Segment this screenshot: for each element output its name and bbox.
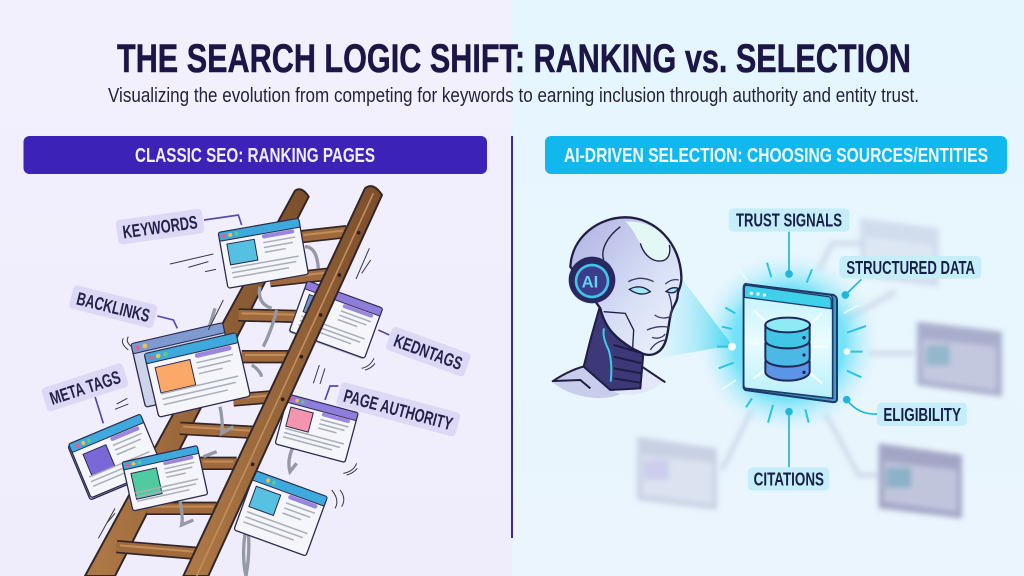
label: citations: CITATIONS (754, 469, 824, 490)
headphone: AI (582, 273, 598, 292)
label: trust signals: TRUST SIGNALS (736, 210, 842, 231)
white rays (721, 268, 859, 390)
label: structured data: STRUCTURED DATA (846, 257, 975, 278)
headphone (569, 257, 615, 303)
label: kedntags (385, 326, 472, 378)
scan beam (659, 277, 732, 358)
left heading bar (24, 136, 487, 174)
panel: classic SEO background (0, 0, 512, 576)
page card stack: backlinks (131, 323, 250, 417)
label: trust signals (729, 208, 849, 232)
ladder front rail (183, 186, 382, 576)
torn ropes (180, 247, 318, 576)
page card: keywords (218, 218, 308, 288)
label: page authority (336, 381, 461, 437)
page card: meta tags (67, 414, 163, 500)
blurred unselected sources (637, 218, 1002, 518)
ladder back rail and rungs (85, 189, 347, 576)
label: page authority: PAGE AUTHORITY (341, 385, 455, 434)
robot head (552, 217, 681, 398)
left heading bar: CLASSIC SEO: RANKING PAGES (135, 145, 375, 167)
label: meta tags: META TAGS (47, 366, 123, 409)
page card: kedntags (288, 281, 383, 360)
label: backlinks: BACKLINKS (75, 288, 152, 326)
database icon (765, 318, 810, 381)
connector lines and nodes (786, 232, 877, 467)
illustration: ladder with ranking pages (41, 186, 472, 576)
label: keywords (115, 208, 205, 245)
label: keywords: KEYWORDS (121, 211, 199, 242)
label: meta tags (41, 362, 129, 412)
forehead panel (625, 221, 670, 261)
face (570, 217, 681, 355)
glow behind selected source (699, 253, 879, 433)
panel: AI-driven selection background (512, 0, 1024, 576)
label: eligibility (877, 403, 967, 426)
rays around selected source (717, 263, 866, 423)
label: kedntags: KEDNTAGS (391, 330, 465, 374)
card sparkles (750, 310, 827, 383)
illustration: AI selection (552, 208, 1002, 518)
selected source card (744, 284, 837, 402)
label: backlinks (68, 285, 158, 329)
page card: lower right (234, 471, 327, 556)
bust and shoulders (552, 365, 622, 398)
neck (584, 308, 643, 390)
page card: page authority (275, 394, 358, 462)
glowing nodes (728, 343, 850, 355)
label: eligibility: ELIGIBILITY (883, 404, 961, 425)
center divider (511, 136, 513, 538)
eyes nose mouth (629, 287, 678, 294)
label: citations (748, 467, 829, 491)
motion lines (98, 248, 375, 538)
page card: green (122, 446, 208, 511)
label: structured data (839, 256, 981, 279)
leader lines (95, 215, 389, 423)
right heading bar (545, 136, 1007, 174)
